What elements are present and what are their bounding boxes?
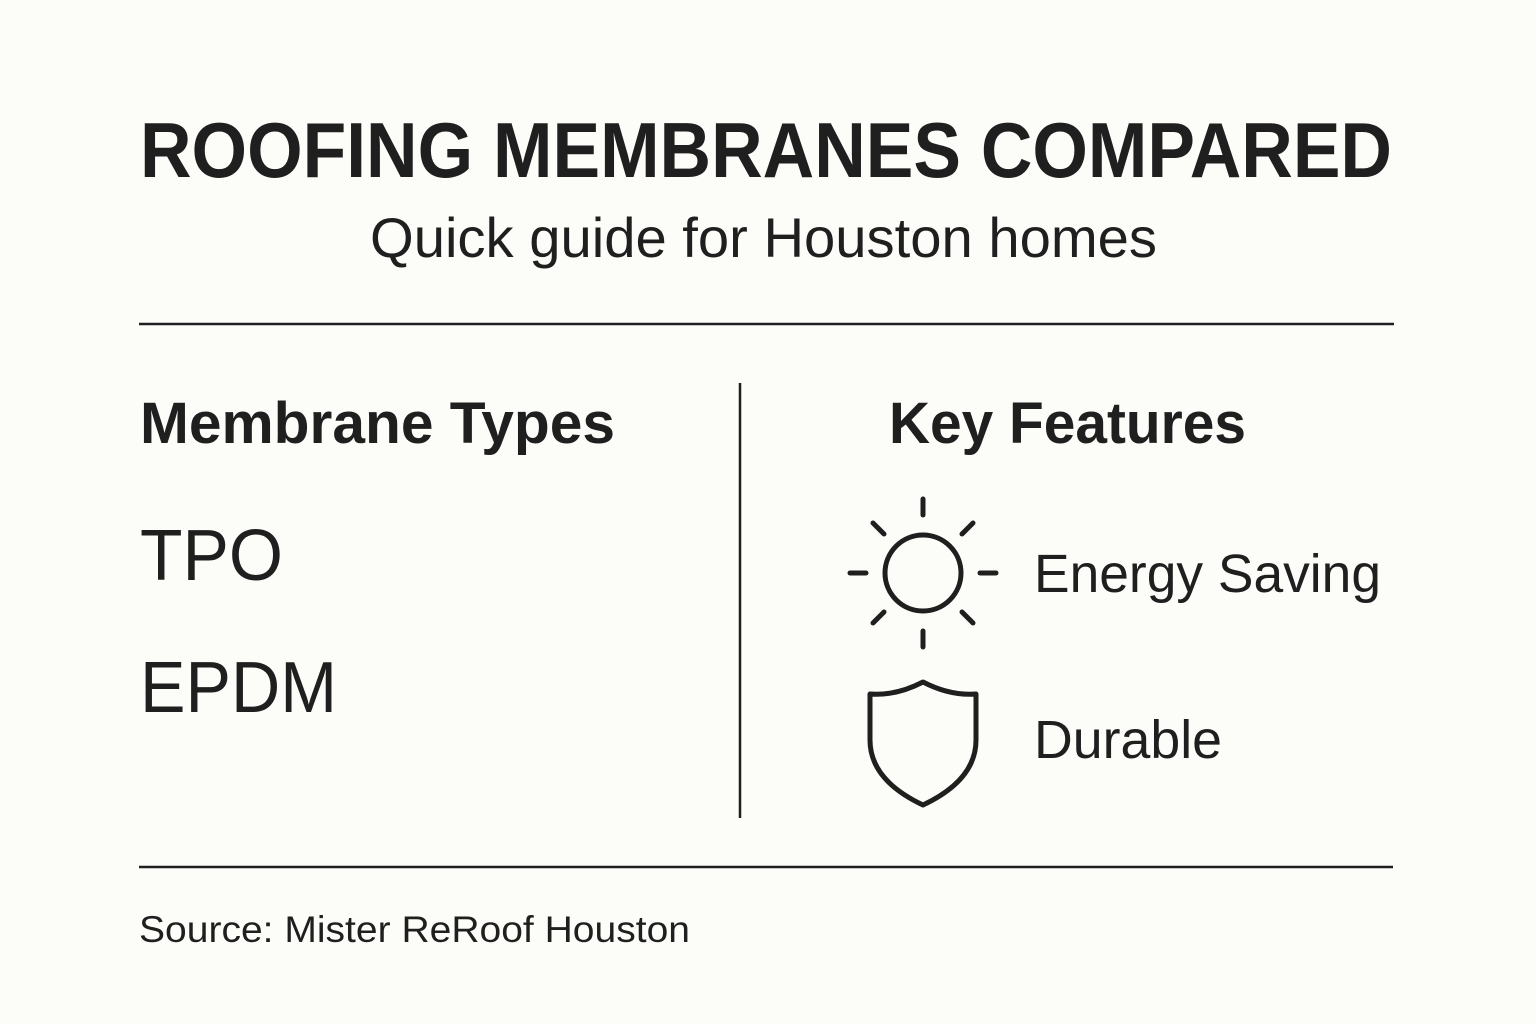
item: TPO: TPO	[140, 516, 283, 596]
icon: shield	[870, 682, 976, 805]
label: energy saving: Energy Saving	[1034, 544, 1381, 604]
panel: membrane types	[140, 391, 615, 728]
panel: key features	[850, 391, 1381, 805]
title: ROOFING MEMBRANES COMPARED	[140, 106, 1392, 194]
icon: sun	[850, 499, 996, 647]
item: EPDM: EPDM	[140, 648, 337, 728]
label: durable: Durable	[1034, 710, 1222, 770]
heading: key features: Key Features	[889, 391, 1246, 456]
source: Source: Mister ReRoof Houston	[139, 909, 690, 950]
subtitle: Quick guide for Houston homes	[370, 206, 1157, 269]
heading: membrane types: Membrane Types	[140, 391, 615, 456]
